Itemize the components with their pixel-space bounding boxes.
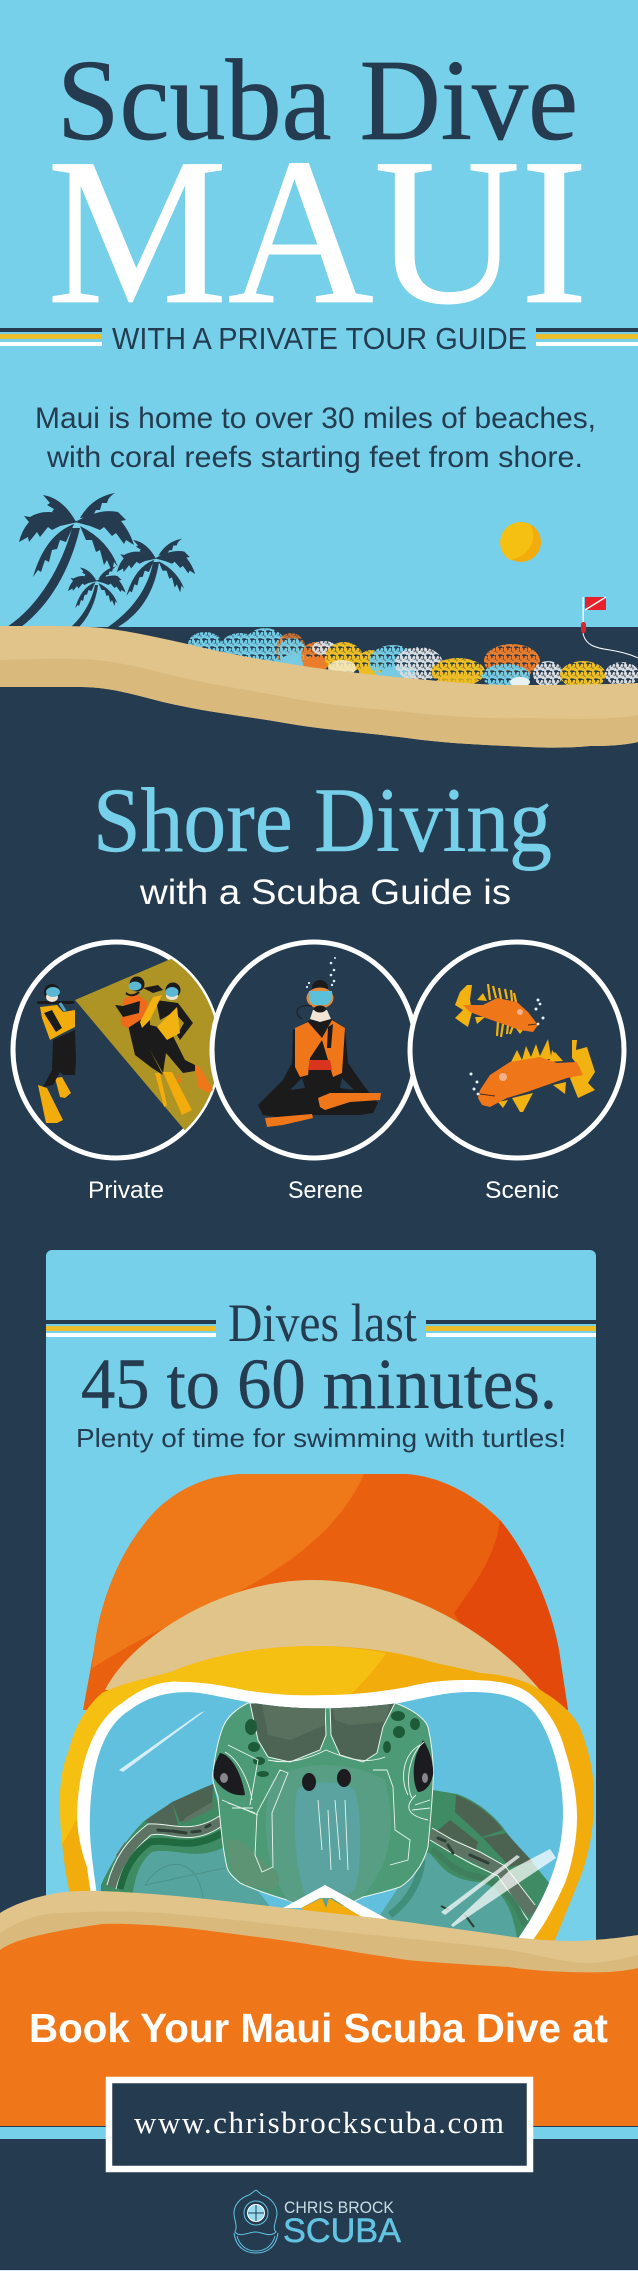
turtle brow spots <box>245 1711 420 1777</box>
panel: dive duration card <box>46 1250 596 1950</box>
label: Private: Private <box>88 1177 164 1204</box>
turtle eye: right <box>414 1740 433 1792</box>
illustration: turtle in a dive mask <box>60 1474 594 1945</box>
panel: serene diver circle <box>212 942 416 1158</box>
title: MAUI: MAUI <box>47 116 588 348</box>
two divers in the beam <box>115 976 213 1115</box>
fish: upper <box>455 984 538 1037</box>
turtle head <box>213 1703 433 1915</box>
card heading: Dives last: Dives last <box>228 1293 417 1353</box>
title: Scuba Dive: Scuba Dive <box>57 37 578 165</box>
intro text: with coral reefs starting feet from shore. <box>46 441 583 474</box>
logo text: Scuba: SCUBA <box>283 2212 401 2250</box>
top sand wave <box>0 626 638 748</box>
icon: sun <box>500 522 541 562</box>
intro text <box>35 402 596 474</box>
heading: Shore Diving: Shore Diving <box>93 769 552 871</box>
turtle nostrils <box>302 1769 351 1791</box>
turtle cheeks <box>266 1765 391 1915</box>
footer: orange call to action band <box>0 1924 638 2126</box>
subtitle: with a private tour guide: WITH A PRIVATE TOUR GUIDE <box>112 321 527 356</box>
website button <box>109 2080 530 2169</box>
subtitle stripes right <box>536 328 638 346</box>
mask strap <box>105 1580 540 1690</box>
lower sand wave <box>0 1891 638 1980</box>
icon: diving helmet <box>234 2190 278 2253</box>
subheading: with a Scuba Guide is: with a Scuba Guide is <box>139 873 511 912</box>
icon: dive flag and buoy <box>581 597 638 658</box>
card stripes left <box>46 1320 216 1337</box>
fish: lower <box>478 1039 595 1112</box>
call to action text: Book Your Maui Scuba Dive at <box>29 2005 608 2051</box>
mask nose bridge <box>283 1885 389 1925</box>
icon: palm trees <box>7 493 195 627</box>
mask yellow frame <box>60 1646 594 1945</box>
mask glass and turtle <box>85 1685 570 1945</box>
card text: plenty of time: Plenty of time for swimming with turtles! <box>76 1423 566 1453</box>
coral reef <box>188 628 638 689</box>
swim cap <box>83 1474 568 1710</box>
label: Serene: Serene <box>288 1177 363 1204</box>
logo text: Chris Brock: CHRIS BROCK <box>284 2198 395 2217</box>
turtle eye: left <box>213 1753 245 1795</box>
turtle face lines <box>222 1742 430 1872</box>
card figure: 45 to 60 minutes: 45 to 60 minutes. <box>81 1344 557 1424</box>
subtitle stripes left <box>0 328 102 346</box>
turtle shell left <box>100 1784 270 1906</box>
bubbles <box>306 957 336 988</box>
turtle snout <box>295 1782 360 1905</box>
turtle scutes <box>250 1703 395 1762</box>
background: sky <box>0 0 638 627</box>
turtle lower left patch <box>228 1839 279 1890</box>
label: Scenic: Scenic <box>485 1177 559 1204</box>
footer light blue stripe <box>0 2127 638 2139</box>
logo: Chris Brock Scuba <box>234 2190 401 2253</box>
intro text: Maui is home to over 30 miles of beaches, <box>35 402 596 435</box>
glass reflections <box>119 1711 556 1927</box>
flashlight beam <box>75 958 214 1130</box>
website address: www.chrisbrockscuba.com <box>134 2105 504 2140</box>
bottom edge line <box>0 2270 638 2271</box>
panel: scenic fish circle <box>410 942 624 1158</box>
mask white rim <box>77 1680 577 1945</box>
bubbles <box>470 998 544 1095</box>
meditating diver <box>258 980 381 1127</box>
panel: private divers circle <box>10 940 216 1160</box>
turtle shell right <box>380 1790 549 1938</box>
card stripes right <box>426 1320 596 1337</box>
diver with torch <box>37 984 76 1123</box>
